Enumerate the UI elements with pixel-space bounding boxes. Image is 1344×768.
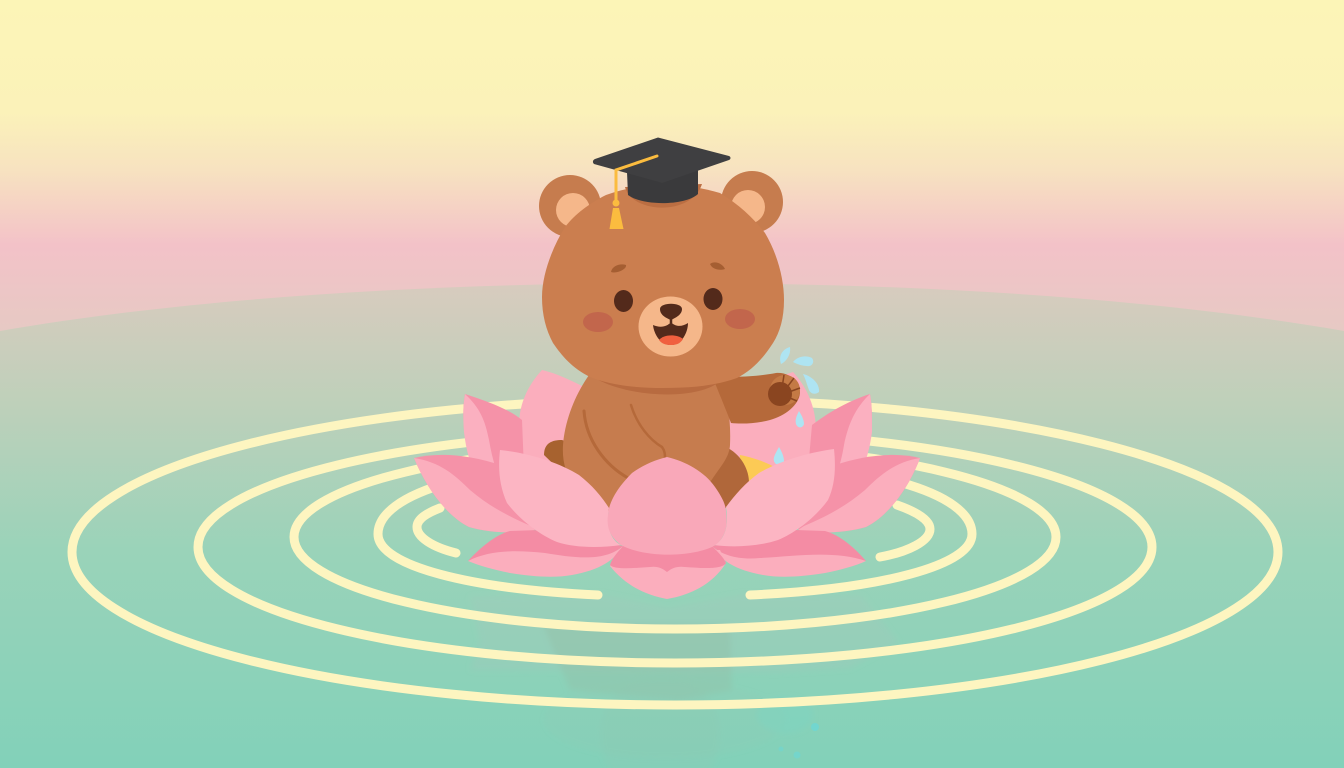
background: pond water: [0, 283, 1344, 768]
right lower petal: [712, 530, 866, 577]
reflection in water: [470, 594, 898, 768]
bottom center petal: [610, 546, 726, 599]
bear: raised arm and paw: [712, 373, 800, 424]
cap shadow: [625, 184, 702, 208]
water ripples: [72, 399, 1278, 705]
reflected water droplets: [778, 723, 819, 758]
left upright petal: [463, 394, 530, 525]
lotus: back petals: [519, 370, 816, 490]
left ear: [539, 175, 601, 237]
bear: body: [563, 375, 730, 515]
eyebrows: [611, 262, 725, 272]
left lower petal: [468, 530, 623, 577]
lotus: front petals: [414, 394, 920, 599]
center bud: [608, 457, 727, 555]
eyes: [614, 288, 722, 312]
left horizontal petal: [414, 455, 535, 532]
nose and mouth: [653, 304, 688, 345]
head shape: [542, 185, 784, 388]
bear: legs and foot: [544, 440, 776, 508]
left front petal: [499, 450, 621, 547]
cheeks: [583, 309, 755, 332]
tassel: [610, 156, 657, 229]
right horizontal petal: [798, 455, 920, 532]
graduation cap: [593, 138, 730, 229]
right ear: [721, 171, 783, 233]
neck shadow: [589, 365, 721, 394]
bear: head: [539, 171, 784, 394]
muzzle: [638, 296, 702, 356]
right upright petal: [805, 394, 872, 525]
water droplets: [774, 347, 819, 465]
right front petal: [714, 449, 835, 546]
background: sunset sky: [0, 0, 1344, 340]
